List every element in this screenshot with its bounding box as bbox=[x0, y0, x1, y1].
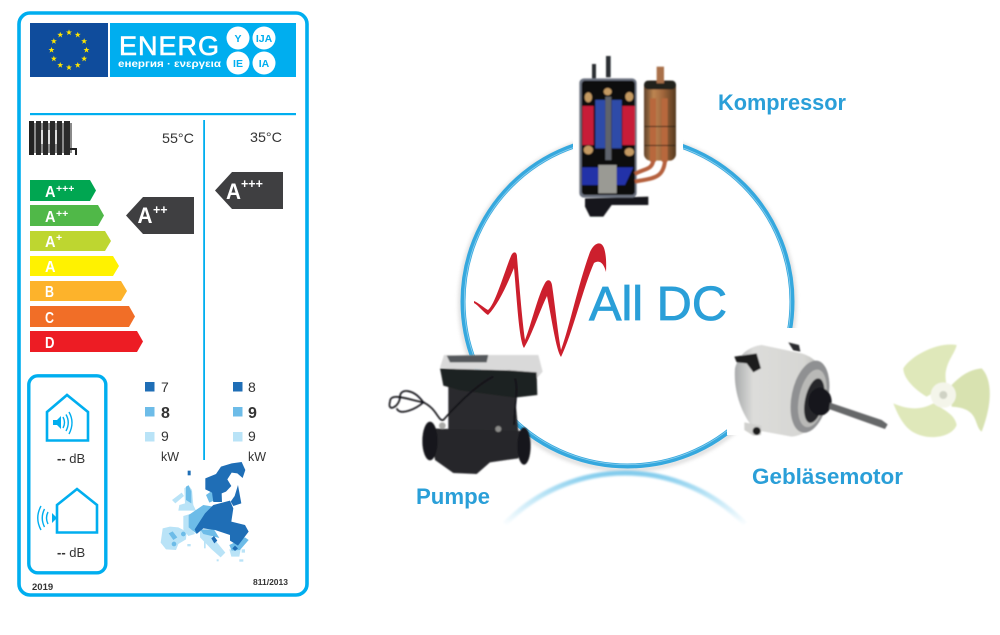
callout: A+++ rating at 35°C bbox=[215, 172, 283, 209]
heading: energy banner: IA bbox=[259, 58, 270, 70]
callout: A++ rating at 55°C: ++ bbox=[153, 203, 168, 217]
icon: EU flag bbox=[30, 23, 108, 77]
text: outdoor dB: -- dB bbox=[57, 545, 85, 560]
label: Kompressor: Kompressor bbox=[718, 90, 846, 115]
chart: efficiency scale: A bbox=[45, 234, 56, 251]
icon: Europe climate map bbox=[161, 462, 249, 562]
diagram: All DC circle bbox=[460, 100, 817, 470]
legend: 35°C kW: 9 bbox=[248, 405, 257, 422]
legend: 55°C kW: 7 bbox=[161, 379, 169, 395]
legend: 55°C kW bbox=[145, 379, 179, 464]
panel: energy label bbox=[19, 13, 307, 595]
icon: All DC red waveform bbox=[474, 243, 606, 357]
chart: efficiency scale: + bbox=[56, 232, 62, 244]
icon: pump bbox=[389, 355, 543, 474]
legend: 55°C kW: kW bbox=[161, 450, 179, 464]
chart: efficiency scale: A bbox=[45, 184, 56, 201]
callout: A++ rating at 55°C bbox=[126, 197, 194, 234]
text: regulation: 811/2013 bbox=[253, 577, 288, 587]
chart: efficiency scale: D bbox=[45, 335, 54, 352]
heading: energy banner bbox=[110, 23, 296, 77]
icon: outdoor noise house bbox=[38, 489, 97, 532]
legend: 55°C kW: 9 bbox=[161, 428, 169, 444]
label: Gebläsemotor: Gebläsemotor bbox=[752, 464, 903, 489]
chart: efficiency scale: A bbox=[45, 209, 56, 226]
heading: energy banner: ENERG bbox=[119, 31, 219, 61]
reflection of circle bbox=[505, 473, 745, 524]
icon: blower motor bbox=[734, 342, 888, 437]
callout: A+++ rating at 35°C: A bbox=[226, 179, 241, 204]
icon: radiator bbox=[29, 121, 76, 155]
legend: 35°C kW bbox=[233, 379, 266, 464]
chart: efficiency scale bbox=[30, 180, 143, 352]
heading: energy banner: IE bbox=[233, 58, 243, 70]
legend: 35°C kW: 8 bbox=[248, 379, 256, 395]
text: year: 2019 bbox=[32, 582, 53, 593]
heading: energy banner: Y bbox=[234, 33, 242, 45]
heading: energy banner: енергия · ενεργεια bbox=[118, 58, 222, 70]
legend: 55°C kW: 8 bbox=[161, 405, 170, 422]
chart: efficiency scale: A bbox=[45, 259, 56, 276]
text: All DC: All DC bbox=[589, 278, 727, 331]
callout: A+++ rating at 35°C: +++ bbox=[241, 177, 263, 191]
callout: A++ rating at 55°C: A bbox=[138, 203, 153, 228]
chart: efficiency scale: +++ bbox=[56, 183, 74, 195]
legend: 35°C kW: 9 bbox=[248, 428, 256, 444]
text: 35°C: 35°C bbox=[250, 129, 282, 145]
legend: 35°C kW: kW bbox=[248, 450, 266, 464]
icon: compressor bbox=[579, 56, 676, 217]
heading: energy banner: IJA bbox=[256, 33, 273, 45]
text: indoor dB: -- dB bbox=[57, 451, 85, 466]
text: 55°C: 55°C bbox=[162, 130, 194, 146]
chart: efficiency scale: C bbox=[45, 310, 54, 327]
chart: efficiency scale: B bbox=[45, 284, 54, 301]
chart: efficiency scale: ++ bbox=[56, 208, 68, 220]
icon: fan blade bbox=[893, 344, 990, 437]
label: Pumpe: Pumpe bbox=[416, 484, 490, 509]
icon: indoor noise house bbox=[47, 395, 88, 440]
panel: noise levels bbox=[29, 376, 106, 573]
